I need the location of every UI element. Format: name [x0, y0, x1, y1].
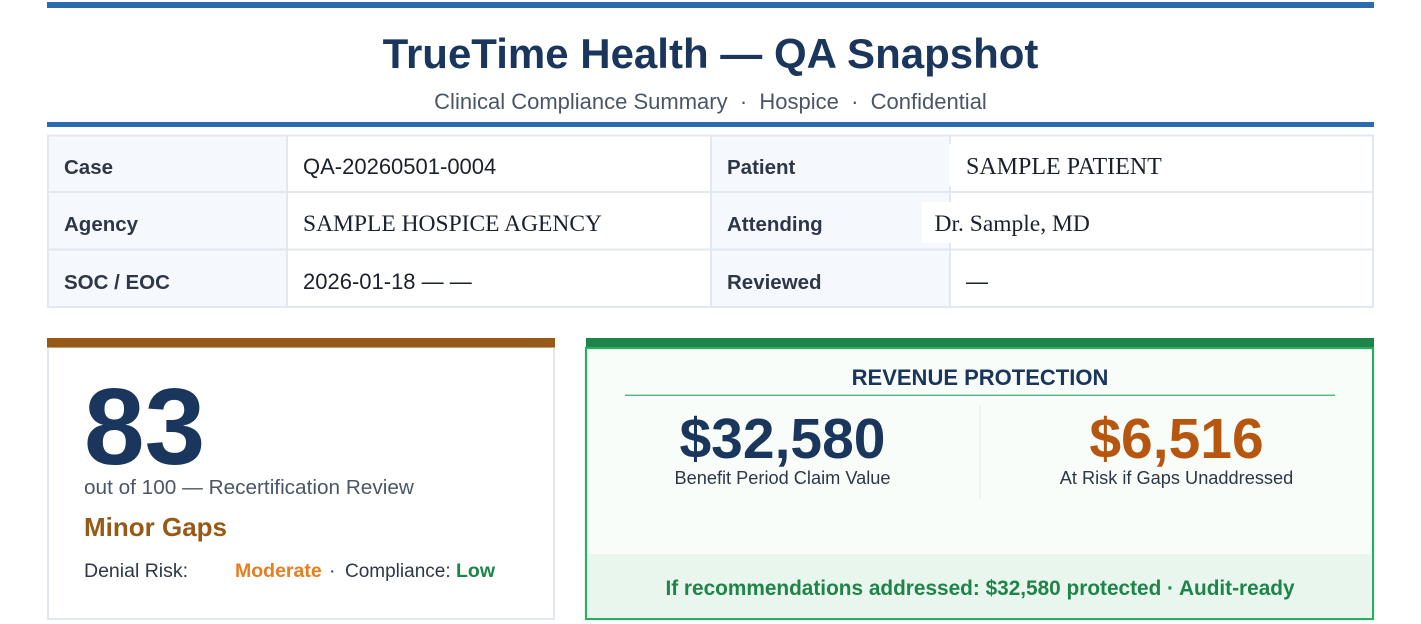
title: TrueTime Health — QA Snapshot [383, 30, 1038, 77]
panel heading: REVENUE PROTECTION [852, 365, 1108, 390]
row: SOC/EOC and reviewed: — [966, 269, 988, 294]
risk line [84, 560, 496, 582]
row: agency and attending: Agency [64, 213, 139, 236]
header rule bottom [47, 122, 1374, 127]
metric: at risk: At Risk if Gaps Unaddressed [1060, 468, 1293, 488]
metric: claim value: Benefit Period Claim Value [674, 468, 891, 488]
row: SOC/EOC and reviewed [64, 269, 988, 294]
footer band [587, 554, 1372, 618]
row: SOC/EOC and reviewed: SOC / EOC [64, 271, 170, 294]
risk line: Moderate [235, 560, 322, 582]
risk line: Low [456, 560, 496, 582]
metric: claim value: $32,580 [679, 407, 886, 471]
header rule top [47, 2, 1374, 8]
row: case and patient [64, 144, 1162, 186]
case details table [48, 135, 1373, 307]
row: case and patient: SAMPLE PATIENT [966, 154, 1162, 180]
panel: revenue protection [586, 338, 1374, 619]
metric: at risk: $6,516 [1089, 407, 1264, 471]
row: SOC/EOC and reviewed: 2026-01-18 — — [303, 269, 472, 294]
footer statement: If recommendations addressed: $32,580 protected · Audit-ready [665, 577, 1295, 600]
row: case and patient: Patient [727, 156, 796, 179]
row: case and patient: Case [64, 156, 113, 179]
row: SOC/EOC and reviewed: Reviewed [727, 271, 822, 294]
panel: score [47, 338, 555, 619]
metric: at risk [1060, 407, 1293, 488]
row: agency and attending: SAMPLE HOSPICE AGENCY [303, 211, 602, 237]
risk line: Compliance: [345, 561, 451, 582]
score caption: out of 100 — Recertification Review [84, 476, 415, 499]
row: agency and attending: Attending [727, 213, 823, 236]
status: Minor Gaps [84, 512, 227, 542]
risk line: Denial Risk: [84, 560, 188, 582]
row: case and patient: QA-20260501-0004 [303, 154, 496, 179]
subtitle: Clinical Compliance Summary · Hospice · Confidential [434, 89, 987, 114]
row: agency and attending [64, 202, 1090, 243]
row: agency and attending: Dr. Sample, MD [934, 211, 1090, 237]
score number: 83 [84, 366, 205, 488]
risk line: · [329, 560, 336, 582]
